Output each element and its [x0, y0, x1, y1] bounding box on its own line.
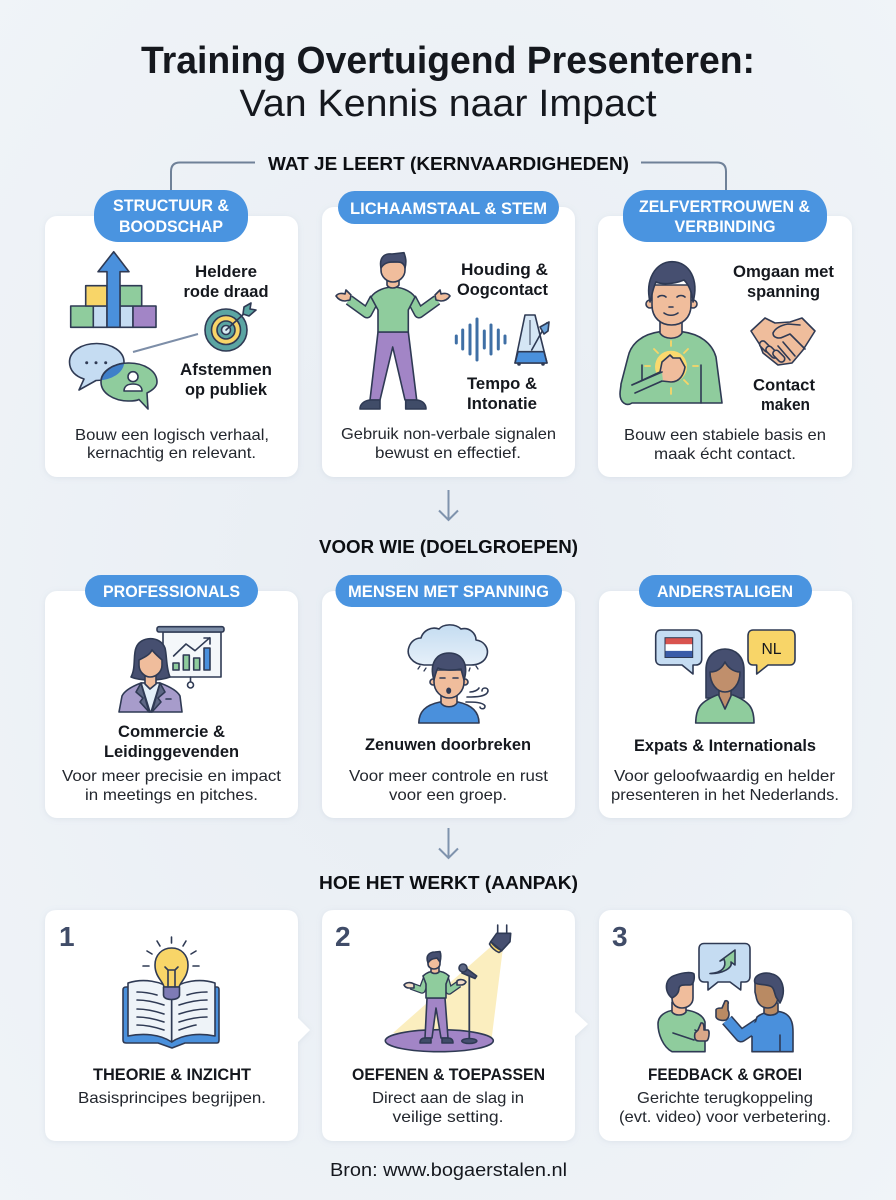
label: theorie en inzicht: THEORIE & INZICHT	[93, 1066, 251, 1084]
connector: right bracket	[641, 162, 726, 190]
panel: lichaamstaal en stem	[322, 191, 575, 477]
description: Voor meer controle en rust	[349, 768, 549, 785]
icon: speech bubble NL	[748, 630, 795, 674]
icon: book with lightbulb	[123, 937, 219, 1048]
panel: theorie en inzicht	[45, 910, 310, 1141]
icon: presentation board	[157, 627, 224, 688]
label: houding en oogcontact: Houding &	[461, 261, 548, 279]
title: Van Kennis naar Impact	[240, 83, 657, 125]
description	[349, 768, 549, 804]
description: maak écht contact.	[654, 446, 796, 463]
label: tempo en intonatie: Intonatie	[467, 395, 537, 413]
label: heldere rode draad: Heldere	[195, 263, 257, 281]
icon: speech bubble NL: NL	[762, 641, 782, 658]
label: houding en oogcontact	[457, 261, 548, 299]
description: in meetings en pitches.	[85, 787, 258, 804]
description	[372, 1090, 524, 1126]
step number 1: 1	[59, 921, 75, 952]
description: Direct aan de slag in	[372, 1090, 524, 1107]
description: kernachtig en relevant.	[87, 445, 256, 462]
panel: structuur en boodschap	[45, 190, 298, 477]
panel: mensen met spanning	[322, 575, 575, 818]
label: commercie en leidinggevenden: Leidinggevenden	[104, 743, 239, 761]
panel: zelfvertrouwen en verbinding	[598, 190, 852, 477]
label: omgaan met spanning	[733, 263, 835, 301]
icon: presenter on stage with spotlight	[385, 925, 511, 1052]
label: commercie en leidinggevenden	[104, 723, 239, 761]
pill: anderstaligen: ANDERSTALIGEN	[657, 583, 793, 601]
pill: zelfvertrouwen en verbinding	[623, 190, 827, 242]
description: Bouw een stabiele basis en	[624, 427, 826, 444]
description: bewust en effectief.	[375, 445, 521, 462]
connector: left bracket	[171, 162, 255, 190]
source: Bron: www.bogaerstalen.nl	[330, 1160, 567, 1180]
description	[611, 768, 839, 804]
pill: zelfvertrouwen en verbinding: VERBINDING	[674, 218, 776, 236]
icon: standing person	[336, 253, 450, 409]
heading: wat je leert: WAT JE LEERT (KERNVAARDIGHEDEN)	[268, 153, 629, 174]
arrow: down to doelgroepen	[439, 490, 458, 520]
label: houding en oogcontact: Oogcontact	[457, 281, 548, 299]
description	[62, 768, 282, 804]
description: Voor geloofwaardig en helder	[614, 768, 836, 785]
label: tempo en intonatie: Tempo &	[467, 375, 537, 393]
pill: structuur en boodschap: BOODSCHAP	[119, 218, 223, 236]
description	[619, 1090, 831, 1126]
label: heldere rode draad	[184, 263, 268, 301]
icon: sound wave	[456, 319, 505, 360]
pill: mensen met spanning: MENSEN MET SPANNING	[348, 583, 549, 601]
description	[341, 426, 556, 462]
icon: handshake	[751, 318, 815, 365]
step number 2: 2	[335, 921, 351, 952]
icon: feedback bubble	[699, 944, 750, 990]
label: zenuwen doorbreken: Zenuwen doorbreken	[365, 736, 531, 754]
icon: nervous person under cloud	[408, 625, 488, 723]
icon: blocks with arrow	[71, 252, 156, 327]
description: presenteren in het Nederlands.	[611, 787, 839, 804]
step number 3: 3	[612, 921, 628, 952]
icon: speech bubbles with audience	[70, 344, 157, 409]
description: Gerichte terugkoppeling	[637, 1090, 813, 1107]
label: commercie en leidinggevenden: Commercie &	[118, 723, 225, 741]
pill: anderstaligen	[639, 575, 812, 607]
description: Gebruik non-verbale signalen	[341, 426, 556, 443]
pill: lichaamstaal en stem: LICHAAMSTAAL & STEM	[350, 200, 547, 218]
icon: person giving thumbs up, right	[716, 973, 793, 1052]
panel: oefenen en toepassen	[322, 910, 588, 1141]
description: veilige setting.	[392, 1109, 504, 1126]
icon: calm person with hand on heart	[620, 262, 722, 404]
label: afstemmen op publiek: Afstemmen	[180, 361, 272, 379]
label: omgaan met spanning: spanning	[747, 283, 820, 301]
icon: woman with long hair	[696, 649, 754, 723]
arrow: down to aanpak	[439, 828, 458, 858]
pill: zelfvertrouwen en verbinding: ZELFVERTROUWEN &	[639, 198, 810, 216]
description: Voor meer precisie en impact	[62, 768, 282, 785]
label: contact maken	[753, 376, 816, 414]
description	[75, 427, 269, 462]
pill: professionals	[85, 575, 258, 607]
heading: voor wie: VOOR WIE (DOELGROEPEN)	[319, 536, 578, 557]
pill: lichaamstaal en stem	[338, 191, 559, 224]
description	[624, 427, 826, 463]
heading: hoe het werkt: HOE HET WERKT (AANPAK)	[319, 872, 578, 893]
label: contact maken: Contact	[753, 376, 816, 394]
icon: speech bubble with Dutch flag	[656, 630, 702, 674]
description: Basisprincipes begrijpen.	[78, 1090, 266, 1107]
title	[141, 40, 755, 125]
icon: businesswoman	[119, 639, 182, 712]
panel: anderstaligen	[599, 575, 852, 818]
description: voor een groep.	[389, 787, 507, 804]
label: oefenen en toepassen: OEFENEN & TOEPASSEN	[352, 1066, 545, 1084]
icon: target	[205, 303, 256, 351]
panel: feedback en groei	[599, 910, 852, 1141]
link line	[133, 334, 198, 352]
label: feedback en groei: FEEDBACK & GROEI	[648, 1066, 802, 1084]
icon: metronome	[515, 315, 549, 366]
title: Training Overtuigend Presenteren:	[141, 40, 755, 82]
icon: person giving thumbs up, left	[658, 973, 709, 1052]
description: Bouw een logisch verhaal,	[75, 427, 269, 444]
panel: professionals	[45, 575, 298, 818]
pill: professionals: PROFESSIONALS	[103, 583, 240, 601]
label: omgaan met spanning: Omgaan met	[733, 263, 835, 281]
pill: mensen met spanning	[336, 575, 562, 607]
label: tempo en intonatie	[467, 375, 537, 413]
label: expats en internationals: Expats & Internationals	[634, 737, 816, 755]
pill: structuur en boodschap	[94, 190, 248, 242]
description: (evt. video) voor verbetering.	[619, 1109, 831, 1126]
label: heldere rode draad: rode draad	[184, 283, 268, 301]
pill: structuur en boodschap: STRUCTUUR &	[113, 197, 229, 215]
label: contact maken: maken	[761, 396, 810, 414]
label: afstemmen op publiek: op publiek	[185, 381, 268, 399]
label: afstemmen op publiek	[180, 361, 272, 399]
